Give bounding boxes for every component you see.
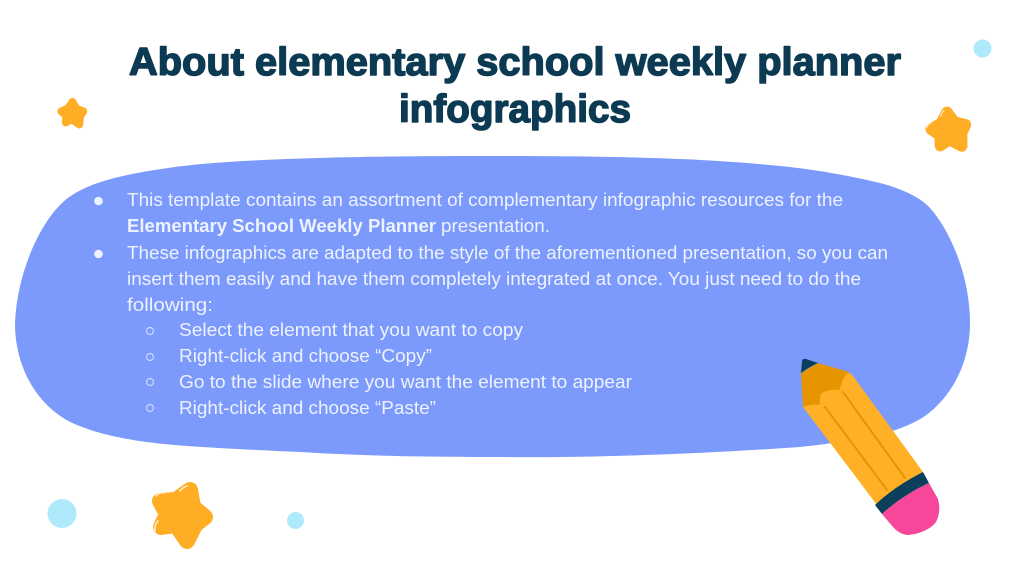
icon: star top left bbox=[59, 99, 87, 129]
icon: pencil bbox=[801, 359, 939, 535]
text: first item line one: This template contains an assortment of complementary infographic resources for the bbox=[127, 190, 843, 210]
dot: top right bbox=[974, 40, 992, 58]
text: second item paragraph: insert them easily and have them completely integrated at once. You just need to do the bbox=[127, 269, 861, 289]
icon: star bottom left bbox=[155, 486, 205, 541]
pencil wood cone bbox=[801, 363, 849, 407]
text: first item line two: presentation. bbox=[441, 216, 550, 236]
pencil metal band bbox=[875, 472, 929, 514]
pencil eraser bbox=[882, 483, 939, 535]
dot: bottom centre small bbox=[287, 512, 304, 529]
title: About elementary school weekly planner bbox=[129, 41, 901, 84]
pencil tip bbox=[801, 359, 818, 373]
text block: description list bbox=[94, 190, 888, 418]
title bbox=[129, 41, 901, 131]
sub-list: copy and paste steps: Right-click and choose “Copy” bbox=[179, 346, 432, 366]
sub-list: copy and paste steps: Right-click and choose “Paste” bbox=[179, 398, 436, 418]
bullet: second item bbox=[94, 250, 103, 258]
text: second item paragraph bbox=[127, 243, 888, 315]
text: first item line two: Elementary School Weekly Planner bbox=[127, 216, 436, 236]
panel: blue blob background bbox=[15, 156, 970, 457]
text: second item paragraph: following: bbox=[127, 295, 213, 315]
title: infographics bbox=[399, 88, 631, 131]
icon: star top right bbox=[924, 105, 973, 156]
sub-list: copy and paste steps: Go to the slide where you want the element to appear bbox=[179, 372, 632, 392]
sub-list: copy and paste steps bbox=[146, 320, 632, 418]
sub-list: copy and paste steps: Select the element that you want to copy bbox=[179, 320, 523, 340]
dot: bottom left large bbox=[48, 499, 76, 528]
pencil grooves bbox=[825, 392, 905, 490]
bullet: first item bbox=[94, 197, 103, 205]
pencil body bbox=[803, 373, 923, 505]
text: second item paragraph: These infographics are adapted to the style of the aforementioned presentation, so you can bbox=[127, 243, 888, 263]
